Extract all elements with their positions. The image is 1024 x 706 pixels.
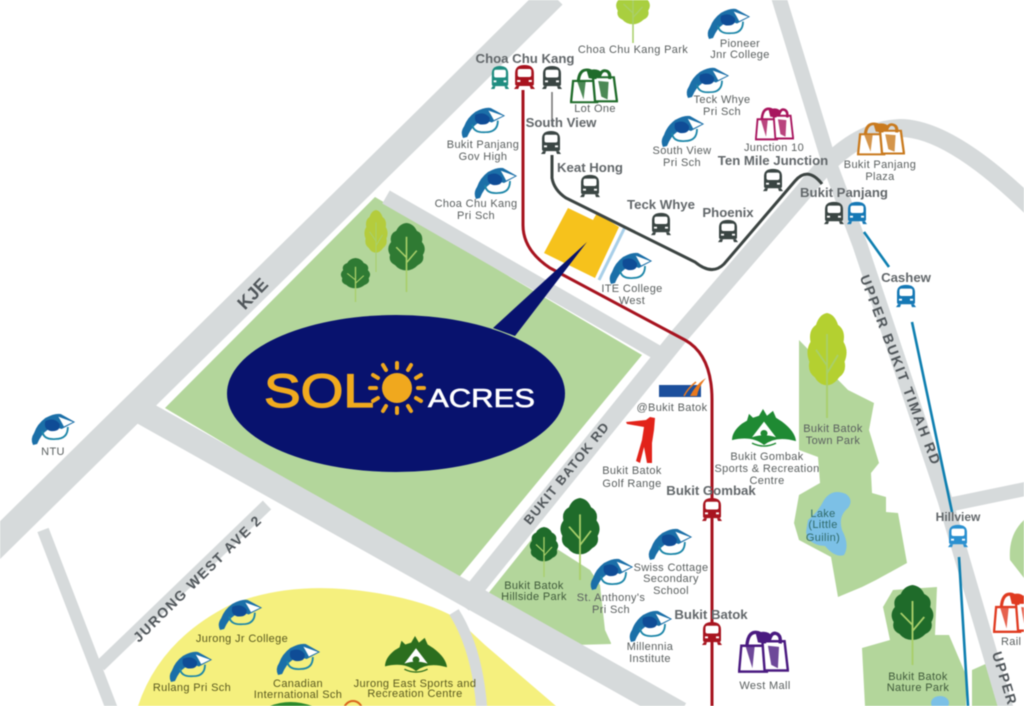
road names: BUKIT BATOK RD [521,419,612,527]
place labels: Choa Chu Kang [435,198,517,210]
place labels: Lot One [574,103,616,115]
lake [806,492,851,556]
icon: Bukit Gombak [702,498,722,521]
icon: ITE cap [610,253,652,284]
place labels: Swiss Cottage [634,562,708,574]
icon: Bukit Panjang blue [847,202,867,224]
place labels: Bukit Panjang [447,139,519,151]
site plot [544,208,619,278]
place labels: Bukit Batok [803,423,863,435]
icon: Bukit Panjang Plaza bags [858,123,904,154]
place labels: West [619,295,645,307]
icon: Phoenix [718,220,738,242]
road names: UPPER BUKIT TIMAH RD [857,272,945,468]
logo word ACRES: ACRES [428,383,535,413]
place labels: International Sch [254,689,342,701]
school icons [32,9,750,682]
place labels: Lake [810,508,836,520]
place labels: Town Park [806,435,860,447]
icon: Bukit Batok [702,622,722,645]
place labels: Pri Sch [592,604,630,616]
park: Bukit Batok Nature Park [862,587,966,706]
station names [476,51,981,622]
dark LRT line [552,155,822,270]
place labels: (Little [808,519,838,531]
place labels: ITE College [601,283,663,295]
place labels: Guilin) [806,532,840,544]
icon: NTU cap [32,414,75,445]
station names: Ten Mile Junction [718,153,828,168]
blue Downtown line [864,232,968,706]
icon: Millennia cap [630,611,672,642]
tree: Town Park [807,313,847,418]
place labels: Junction 10 [744,142,804,154]
tree: Hillside left [530,527,558,577]
icon: Choa Chu Kang dark [542,66,562,89]
place labels: Sports & Recreation [714,463,820,475]
place labels: South View [653,145,711,157]
light blue road marker [599,227,625,280]
place labels: Teck Whye [694,94,750,106]
place labels: Centre [749,475,785,487]
station names: Phoenix [702,205,754,220]
icon: Hillview [948,525,968,547]
icon: Canadian cap [277,644,320,675]
station names: Keat Hong [557,160,623,175]
place labels: Bukit Batok [602,465,662,477]
logo word SOL: SOL [264,364,374,417]
station names: Bukit Gombak [666,483,756,498]
icon: Choa Chu Kang red [514,65,535,89]
place labels: Jurong Jr College [196,633,288,645]
place labels: NTU [41,446,65,458]
tree: district lime [364,210,388,272]
icon: Bukit Panjang dark [824,202,844,224]
icon: St Anthony cap [591,559,633,590]
road names: UPPER [989,650,1021,706]
place labels: Choa Chu Kang Park [578,44,688,56]
place labels: Golf Range [602,478,662,490]
place labels: Pri Sch [457,210,495,222]
icon: Chua Chu Kang Pri cap [475,168,517,199]
icon: Rulang cap [170,652,212,682]
red MRT line [523,90,712,706]
place labels: Plaza [865,171,895,183]
station names: Hillview [936,510,981,524]
station names: South View [526,115,597,130]
icon: Lot One bags [571,69,617,102]
place labels: Recreation Centre [367,688,463,700]
station names: Bukit Panjang [800,185,888,200]
icon: Choa Chu Kang teal [491,66,509,89]
icon: South View [541,131,561,154]
place labels: Bukit Gombak [730,451,804,463]
place labels: Secondary [643,573,699,585]
tree: Choa Chu Kang Park [616,0,650,43]
trees [341,0,933,665]
station names: Teck Whye [627,197,695,212]
station names: Cashew [881,270,932,285]
sports icons [385,409,796,672]
icon: Teck Whye [651,213,671,235]
place labels: Pri Sch [703,106,741,118]
icon: Junction 10 bags [756,108,793,139]
icon: Keat Hong [580,175,600,197]
icon: Swiss Cottage cap [649,529,692,560]
place labels: Institute [629,653,671,665]
icon: Pioneer cap [708,9,750,39]
icon: West Mall bags [739,632,788,672]
icon: South View cap [662,116,704,147]
road names: KJE [233,274,272,313]
logo sun [370,363,424,413]
shopping icons [571,69,1024,672]
place labels: School [653,585,689,597]
place labels: Hillside Park [501,591,567,603]
train stations [491,65,968,645]
place labels: Bukit Panjang [844,159,916,171]
icon: Ten Mile Junction [763,169,783,191]
tree: Nature Park [892,585,933,665]
icon: Bukit Panjang Gov cap [462,108,505,138]
place labels: Millennia [627,641,674,653]
place labels: Bukit Batok [888,671,948,683]
icon: Teck Whye cap [687,68,729,98]
icon: Cashew [896,285,916,307]
icon: Jurong East stadium [385,636,447,672]
green areas [165,197,1024,706]
icon: golfer [626,417,655,463]
station names: Choa Chu Kang [476,51,574,66]
road names: JURONG WEST AVE 2 [130,512,265,645]
icon: Jurong Jr cap [219,600,262,630]
icon: Rail Mall bags [994,594,1024,632]
park: east edge strips [972,520,1024,706]
place labels: St. Anthony's [577,592,645,604]
tree: district small [341,258,370,302]
park: Bukit Batok Hillside Park [483,535,611,645]
place labels: @Bukit Batok [636,402,708,414]
park: Solo Acres district [165,197,642,581]
place labels: Rulang Pri Sch [153,682,231,694]
tree: Hillside right [560,498,600,580]
tree: district large [388,223,425,292]
nature park pond [931,696,949,706]
place labels: Bukit Batok [504,580,564,592]
icon: Bukit Gombak stadium [732,409,796,446]
LRT link Choa Chu Kang to South View [551,92,553,126]
place labels: Nature Park [887,682,949,694]
logo: @Bukit Batok [659,378,706,397]
place labels: Canadian [273,678,323,690]
icon: small facility marks at map foot [270,701,362,706]
place labels: Pioneer [720,38,760,50]
place labels: West Mall [739,680,791,692]
road names [130,272,1021,706]
callout: Solo Acres logo [227,242,587,472]
station names: Bukit Batok [674,607,748,622]
park: Bukit Batok Town Park [794,340,907,597]
place labels: Jurong East Sports and [354,678,476,690]
place labels: Gov High [459,151,507,163]
place labels: Jnr College [710,49,770,61]
yellow district [138,588,556,706]
place labels: Pri Sch [663,157,701,169]
